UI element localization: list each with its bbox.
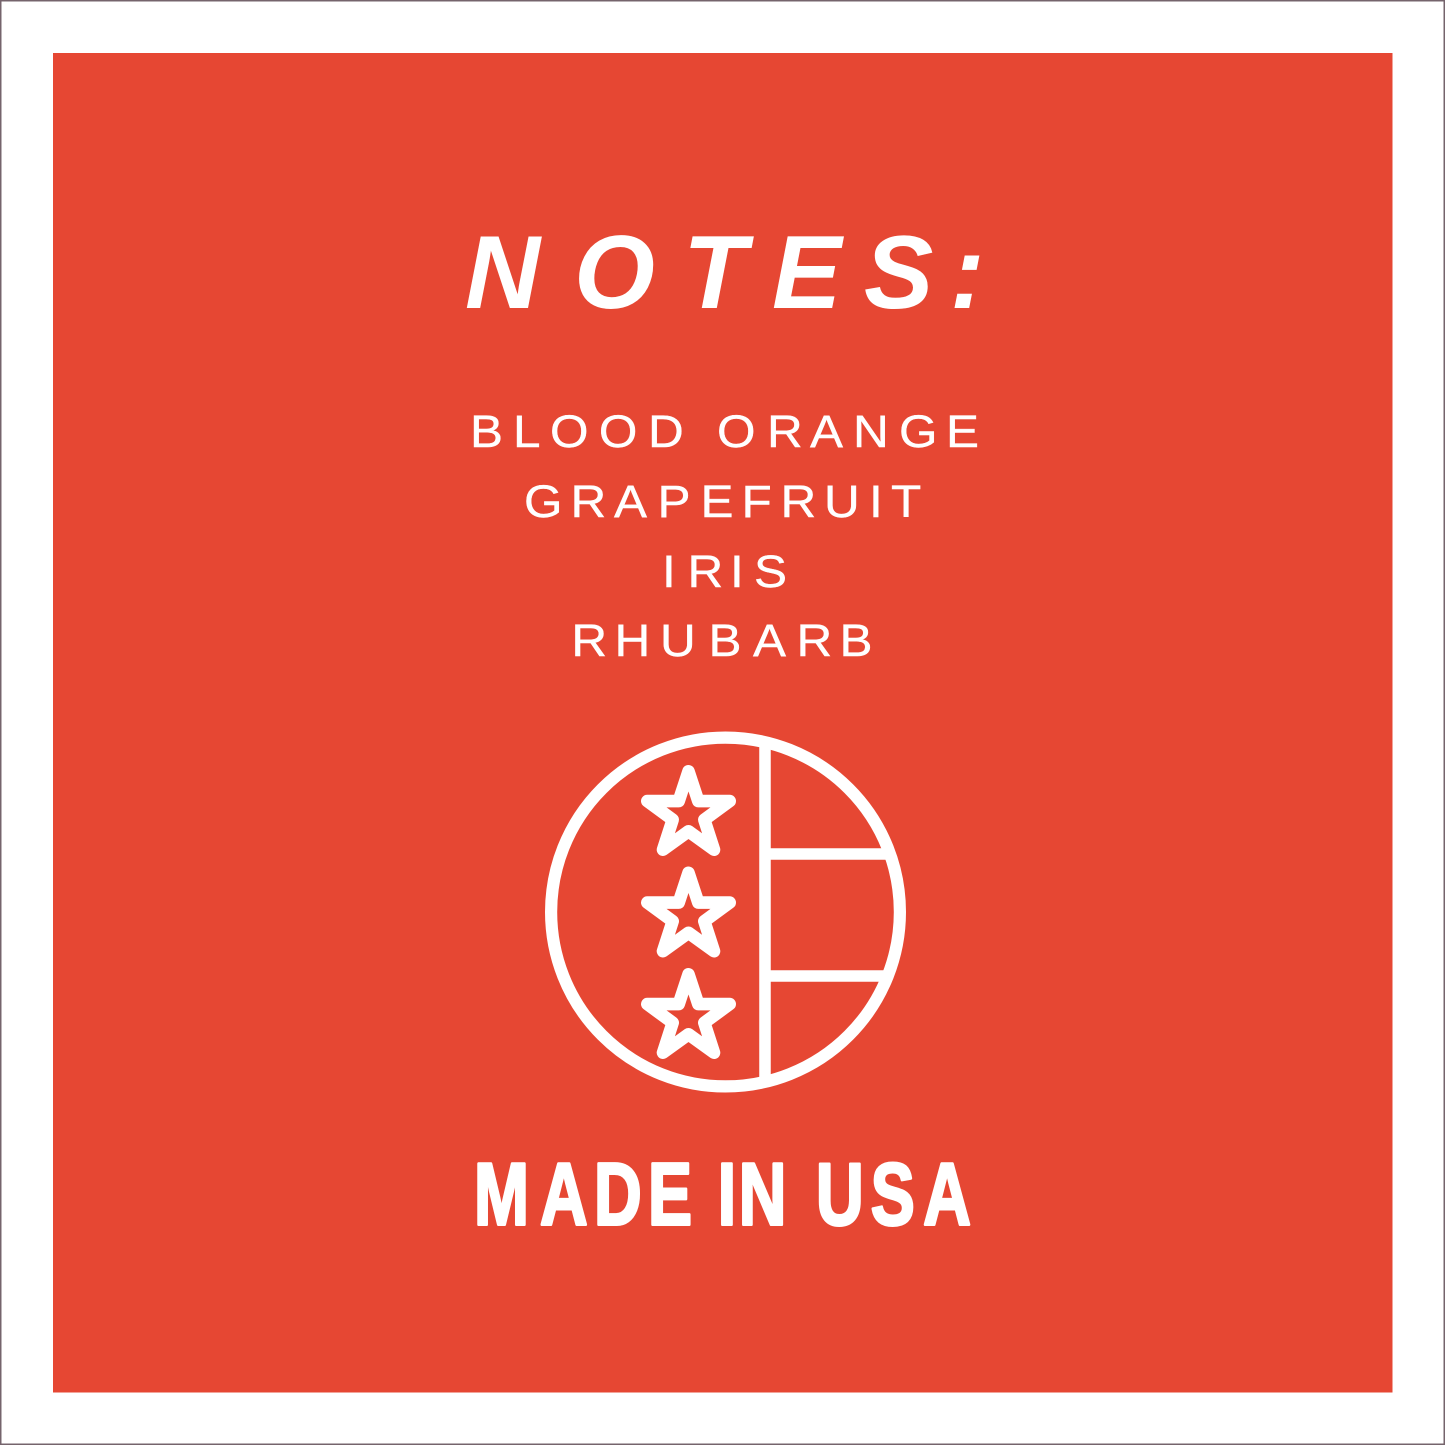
icon: star bottom [647,974,730,1053]
title: NOTES: [465,215,985,331]
icon: star middle [647,873,730,951]
note: iris: IRIS [662,547,787,597]
notes list [470,407,979,666]
made in usa label: MADE IN USA [474,1146,971,1244]
icon: USA flag globe with three stars [551,738,900,1086]
icon: star top [647,771,730,850]
icon: circle outline [551,738,900,1086]
note: grapefruit: GRAPEFRUIT [524,477,921,527]
note: rhubarb: RHUBARB [571,616,873,666]
note: blood orange: BLOOD ORANGE [470,407,979,457]
icon: flag stripes [765,742,890,1082]
